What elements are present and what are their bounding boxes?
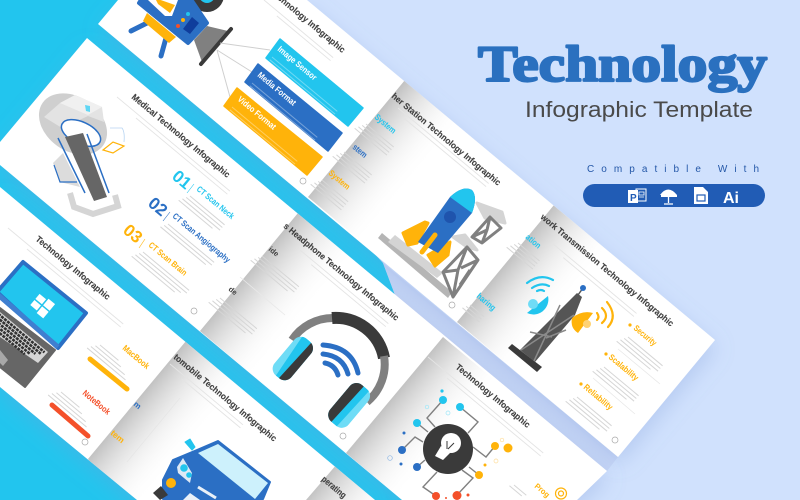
title: headphone: s Headphone Technology Infographic <box>282 221 401 323</box>
item: 03 CT Scan Brain <box>119 220 189 298</box>
item: Reliability: Reliability <box>582 382 615 412</box>
item: 02 CT Scan Angiography: CT Scan Angiography <box>171 211 233 265</box>
icon: CT scanner <box>27 81 124 214</box>
panel: laptop slide <box>0 228 152 445</box>
main title: Technology <box>478 37 767 93</box>
icon: target <box>556 488 566 499</box>
compatible with label: Compatible With <box>587 164 759 175</box>
item: 03 CT Scan Brain: 03 <box>119 220 146 247</box>
item: 01 CT Scan Neck <box>168 166 237 233</box>
panel: network transmission slide <box>462 211 676 443</box>
panel: weather station slide <box>311 91 505 308</box>
label: yellow item: tem <box>109 428 127 445</box>
icon: zoom circle <box>612 437 618 443</box>
card: Image Sensor <box>266 39 363 126</box>
item: Scalability <box>593 352 641 404</box>
subtitle: Infographic Template <box>525 97 753 122</box>
item: NoteBook: NoteBook <box>81 388 113 417</box>
icon: zoom circle <box>82 439 88 445</box>
item: NoteBook <box>48 387 113 436</box>
panel: medical slide <box>27 81 237 314</box>
title: weather station: her Station Technology Infographic <box>390 91 503 188</box>
icon: car <box>153 439 270 500</box>
title: automobile: tomobile Technology Infographic <box>172 352 279 443</box>
panel: bulb technology slide <box>388 357 566 500</box>
card: Image Sensor: Image Sensor <box>276 44 319 83</box>
icon: zoom circle <box>300 178 306 184</box>
slide strip: laptop, automobile, operating <box>0 187 391 500</box>
title: network transmission: work Transmission Technology Infographic <box>538 211 676 328</box>
item: 01 CT Scan Neck: 01 <box>168 166 195 193</box>
periwinkle band between slide strips <box>383 263 618 471</box>
item: 03 CT Scan Brain: CT Scan Brain <box>147 240 189 278</box>
label: side item one: ide <box>267 245 281 258</box>
panel: automobile slide <box>109 352 279 500</box>
item: Security: Security <box>632 323 659 348</box>
slide strip: camera, weather station, network <box>98 0 715 457</box>
title: medical: Medical Technology Infographic <box>130 92 232 180</box>
label: Progress: Prog <box>533 482 552 499</box>
item: MacBook: MacBook <box>121 343 152 371</box>
icon: PowerPoint <box>628 189 646 204</box>
icon: PowerPoint: P <box>630 193 637 204</box>
label: sharing: haring <box>475 291 498 313</box>
icon: laptop <box>0 262 86 387</box>
icon: zoom circle <box>340 433 346 439</box>
item: Reliability <box>566 382 615 434</box>
title: bulb technology: Technology Infographic <box>454 362 532 430</box>
cyan background shape <box>0 0 430 500</box>
icon: windows logo <box>29 292 55 318</box>
icon: zoom circle <box>191 308 197 314</box>
item: 01 CT Scan Neck: CT Scan Neck <box>195 184 237 221</box>
card: Media Format <box>245 64 342 151</box>
panel: camera slide <box>131 0 363 184</box>
icon: Illustrator: Ai <box>723 190 739 207</box>
panel: headphone slide <box>209 221 401 439</box>
icon: Keynote <box>660 190 677 204</box>
icon: antenna tower <box>508 277 613 372</box>
item: Scalability: Scalability <box>607 352 641 383</box>
icon: rocket on launch pad <box>378 189 505 298</box>
label: blue item: m <box>132 400 143 411</box>
title: laptop: Technology Infographic <box>34 234 112 302</box>
item: Security <box>617 323 663 374</box>
label: cyan item: ation <box>524 232 543 250</box>
item: 02 CT Scan Angiography: 02 <box>144 193 171 220</box>
item: 02 CT Scan Angiography <box>144 193 233 268</box>
card: Media Format: Media Format <box>256 70 298 108</box>
icon: video camera <box>131 0 231 64</box>
item: MacBook <box>87 340 152 389</box>
diagram: circuit bulb <box>388 389 512 500</box>
card: Video Format <box>224 88 322 175</box>
icon: Google Slides <box>694 187 708 204</box>
label: side item two: de <box>227 285 239 297</box>
slide strip: medical, headphone, bulb <box>0 38 607 500</box>
label: System yellow: System <box>327 168 353 192</box>
icon: zoom circle <box>449 302 455 308</box>
icon: headphones <box>269 318 385 432</box>
compatibility pill <box>583 184 765 207</box>
label: System cyan: System <box>373 112 399 136</box>
label: System blue: stem <box>351 142 370 160</box>
card: Video Format: Video Format <box>236 94 278 132</box>
